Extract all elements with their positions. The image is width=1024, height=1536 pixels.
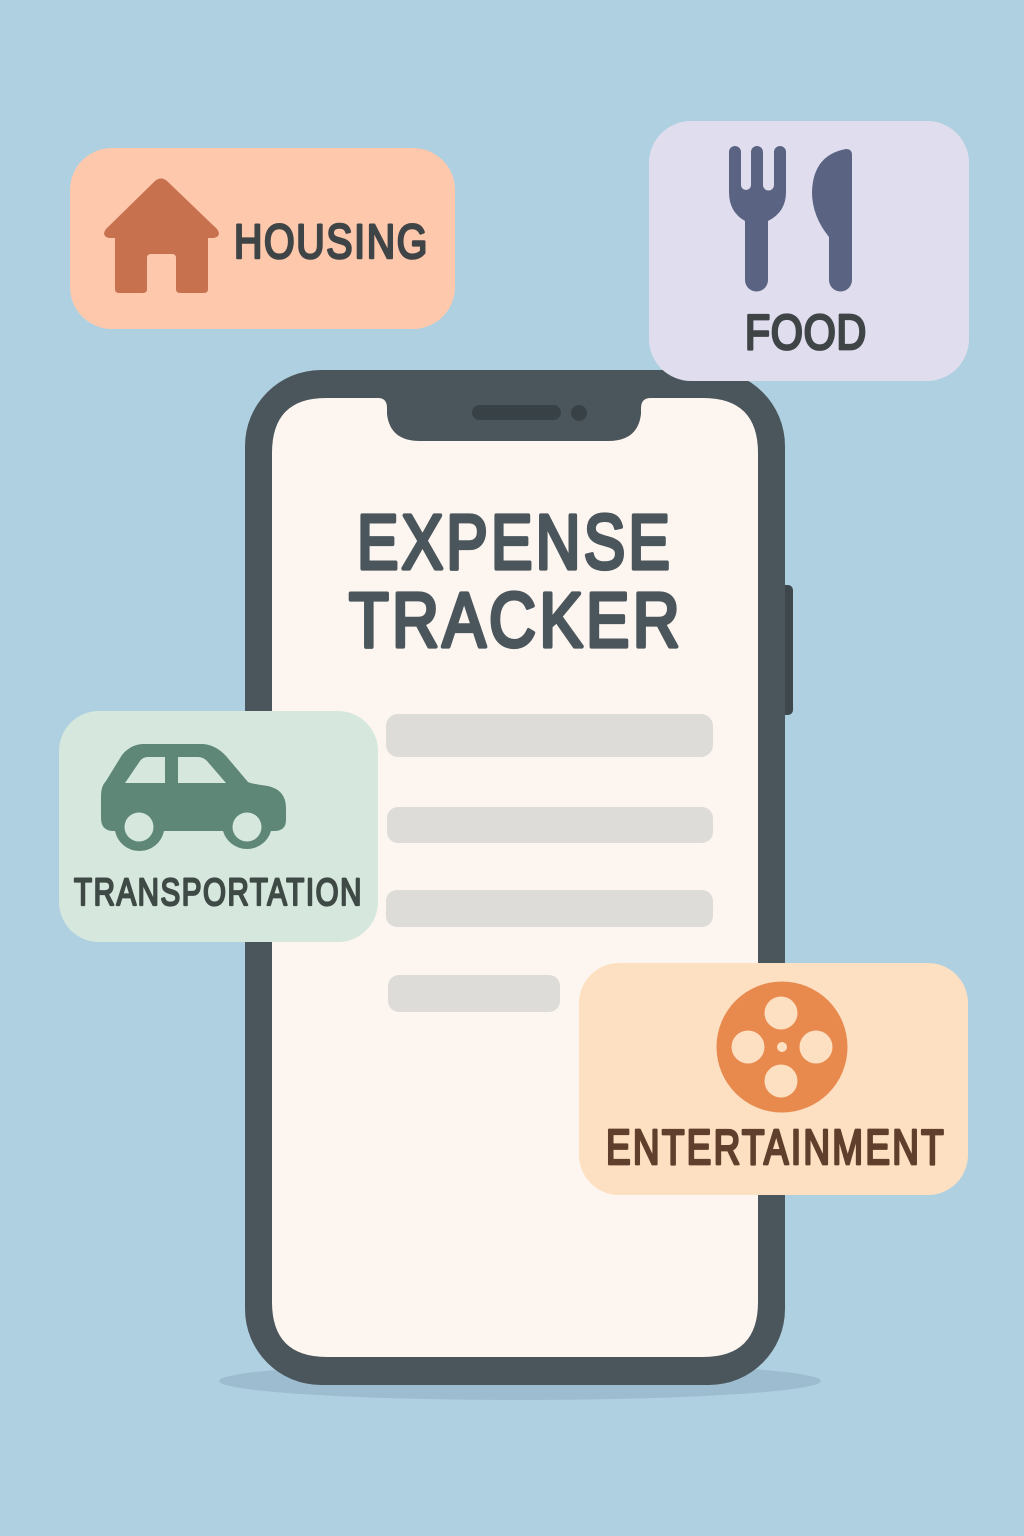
icon: house bbox=[104, 178, 219, 293]
title bbox=[349, 500, 683, 664]
phone bbox=[245, 370, 793, 1385]
phone ground shadow bbox=[219, 1362, 821, 1400]
label: food: FOOD bbox=[745, 306, 867, 360]
label: transportation: TRANSPORTATION bbox=[74, 872, 363, 914]
icon: fork bbox=[729, 146, 786, 292]
icon: film reel bbox=[716, 982, 848, 1112]
notch speaker bbox=[472, 405, 561, 420]
title: EXPENSE bbox=[357, 500, 673, 586]
phone body bbox=[245, 370, 785, 1385]
card: entertainment bbox=[579, 963, 968, 1195]
label: housing: HOUSING bbox=[234, 216, 429, 269]
placeholder rows bbox=[386, 714, 713, 1012]
card: food bbox=[649, 121, 969, 381]
icon: knife bbox=[812, 149, 852, 292]
card: transportation bbox=[59, 711, 378, 942]
phone side button bbox=[778, 585, 793, 715]
notch camera bbox=[571, 405, 587, 421]
title: TRACKER bbox=[349, 578, 683, 664]
phone screen bbox=[272, 398, 758, 1357]
card: housing bbox=[70, 148, 455, 329]
icon: car bbox=[101, 744, 286, 851]
